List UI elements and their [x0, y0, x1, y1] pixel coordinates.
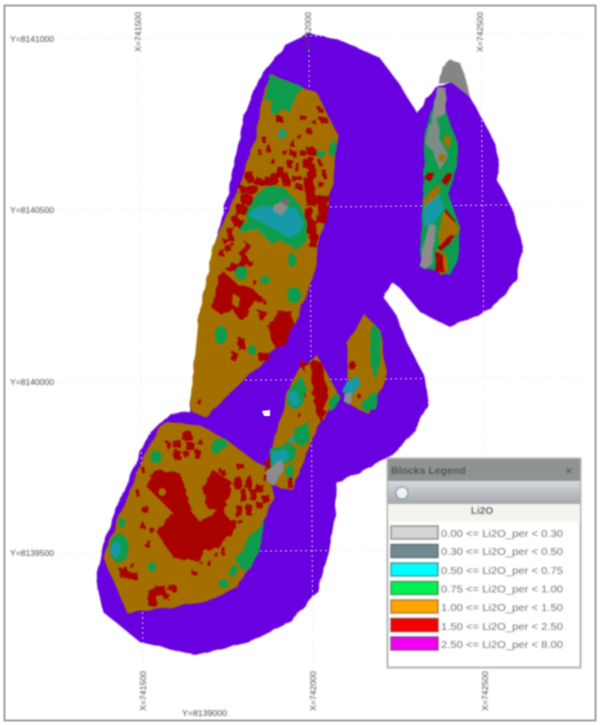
purple waste block envelope	[96, 33, 523, 655]
axis labels: X=741500	[134, 11, 143, 52]
legend entries	[391, 526, 563, 651]
axis labels: X=742500	[481, 670, 490, 711]
lower red patches of upper orebody	[197, 240, 294, 405]
legend entries: 0.75 <= Li2O_per < 1.00	[441, 584, 563, 596]
legend title bar	[388, 459, 580, 481]
upper orebody: grade blocks	[190, 75, 338, 417]
axis labels: X=742000	[304, 11, 313, 52]
white gap	[262, 410, 270, 416]
grid lines	[55, 33, 590, 665]
legend panel	[388, 458, 580, 668]
axis labels	[10, 11, 490, 718]
legend heading: Li2O	[471, 506, 493, 517]
axis labels: X=742500	[476, 11, 485, 52]
middle orebody: grade blocks	[264, 355, 340, 490]
legend entries: 0.00 <= Li2O_per < 0.30	[441, 529, 563, 540]
east orebody: grade blocks	[342, 315, 387, 415]
legend title bar: Blocks Legend	[391, 465, 466, 477]
legend entries: 1.50 <= Li2O_per < 2.50	[441, 622, 563, 633]
legend heading	[388, 504, 580, 522]
axis labels: X=741500	[139, 670, 148, 711]
legend entries: 2.50 <= Li2O_per < 8.00	[441, 640, 563, 651]
legend entries: 0.30 <= Li2O_per < 0.50	[441, 547, 563, 558]
axis labels: Y=8140500	[10, 206, 55, 215]
northeast vein: grade blocks	[419, 60, 470, 275]
axis labels: Y=8141000	[10, 35, 55, 44]
axis labels: X=742000	[309, 670, 318, 711]
legend toolbar	[388, 481, 580, 504]
legend entries: 1.00 <= Li2O_per < 1.50	[441, 603, 563, 614]
southwest orebody: grade blocks	[103, 422, 275, 613]
axis labels: Y=8140000	[10, 378, 55, 387]
legend entries: 0.50 <= Li2O_per < 0.75	[441, 566, 563, 577]
legend title bar: ×	[565, 463, 573, 478]
axis labels: Y=8139000	[182, 709, 228, 718]
axis labels: Y=8139500	[10, 549, 55, 558]
green and teal patch	[232, 75, 338, 262]
